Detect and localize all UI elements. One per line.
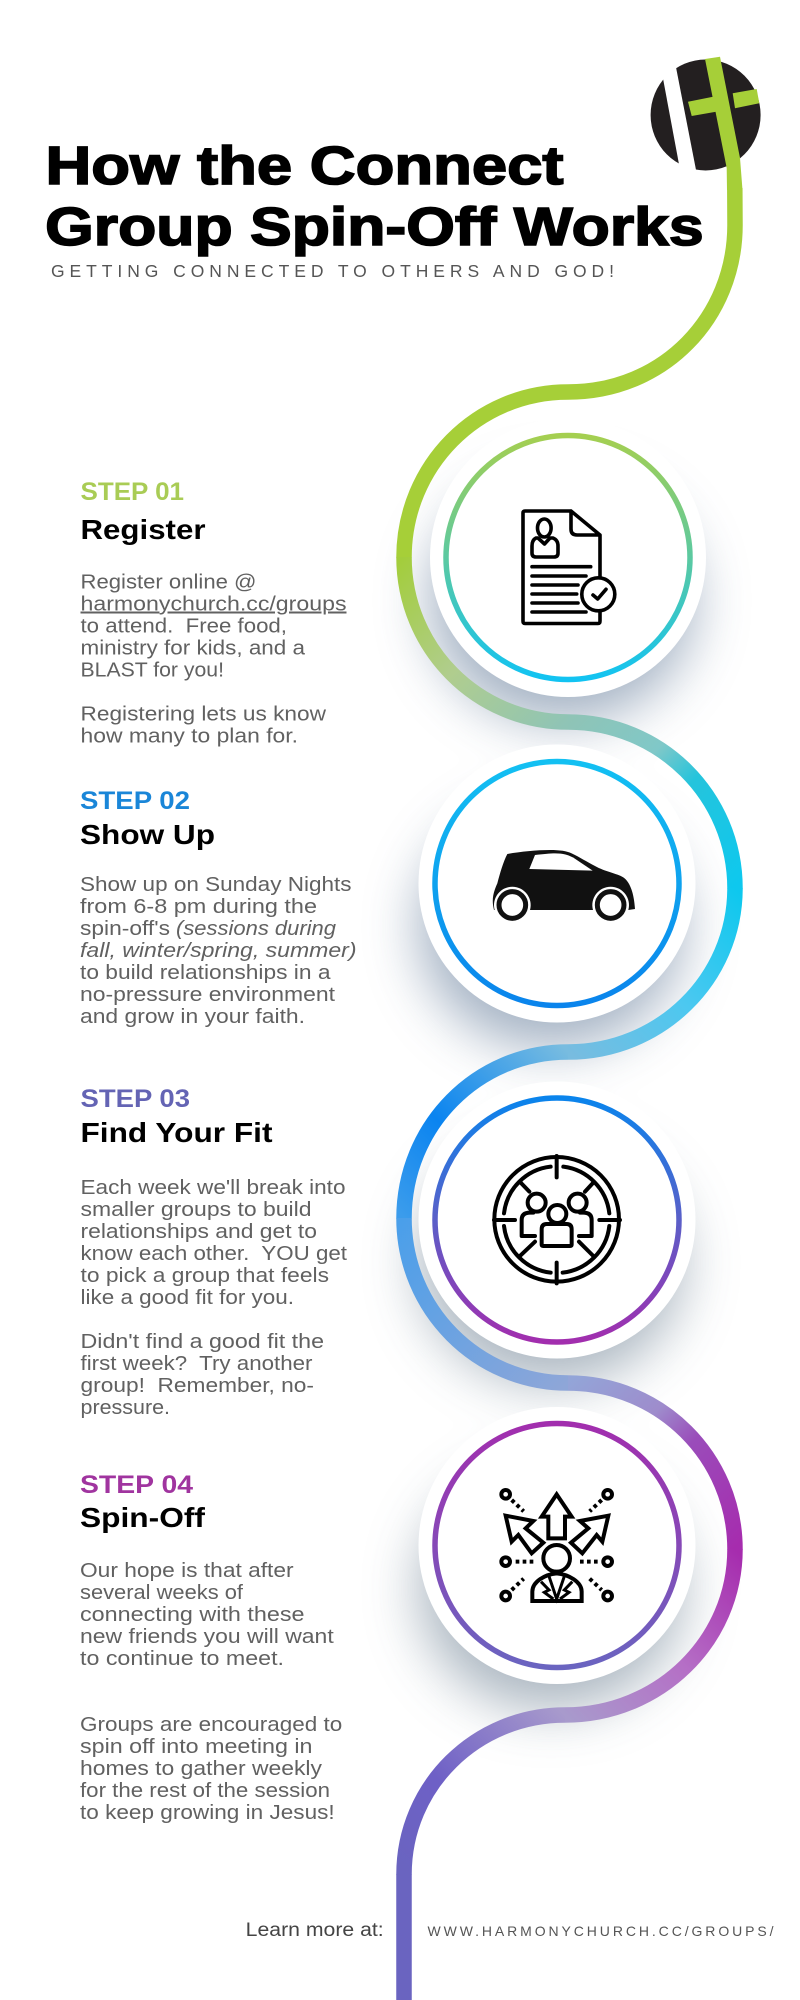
step 4 text: spin off into meeting in xyxy=(80,1736,312,1758)
icon: car xyxy=(493,850,635,918)
step 3 text: group! Remember, no- xyxy=(80,1375,314,1397)
step 4 text: to continue to meet. xyxy=(80,1648,284,1670)
card shadows xyxy=(419,478,694,1710)
step 2 text xyxy=(80,787,356,1028)
subtitle: GETTING CONNECTED TO OTHERS AND GOD! xyxy=(51,261,614,281)
step 4 text: to keep growing in Jesus! xyxy=(80,1802,335,1824)
step 2 text: from 6-8 pm during the xyxy=(80,896,317,918)
step 1 text: BLAST for you! xyxy=(80,660,224,682)
step 2 text: STEP 02 xyxy=(80,787,190,815)
step 4 text: for the rest of the session xyxy=(80,1780,330,1802)
step 1 text xyxy=(80,478,346,748)
step 1 text: how many to plan for. xyxy=(80,726,298,748)
title xyxy=(45,136,704,257)
title: Group Spin-Off Works xyxy=(45,197,704,257)
step 3 text: know each other. YOU get xyxy=(80,1243,347,1265)
step 4 circle xyxy=(418,1407,696,1684)
step 3 text: STEP 03 xyxy=(80,1085,190,1113)
logo xyxy=(651,57,761,190)
step 1 text: ministry for kids, and a xyxy=(80,638,306,660)
step 1 text: Registering lets us know xyxy=(80,704,327,726)
step 3 text xyxy=(80,1085,347,1419)
step 4 text: Groups are encouraged to xyxy=(80,1714,342,1736)
step 2 text: Show up on Sunday Nights xyxy=(80,874,352,896)
step 3 text: first week? Try another xyxy=(80,1353,313,1375)
footer: learn more: Learn more at: xyxy=(246,1920,384,1941)
step 2 circle xyxy=(418,744,696,1022)
step 4 text: homes to gather weekly xyxy=(80,1758,322,1780)
title: How the Connect xyxy=(46,136,564,196)
step 4 text: several weeks of xyxy=(80,1582,243,1604)
step 2 text: (sessions during xyxy=(176,918,336,940)
step 2 text: fall, winter/spring, summer) xyxy=(80,940,356,962)
step 2 text: and grow in your faith. xyxy=(80,1006,305,1028)
step 3 text: Each week we'll break into xyxy=(80,1177,346,1199)
step 2 text: no-pressure environment xyxy=(80,984,335,1006)
step 3 text: smaller groups to build xyxy=(80,1199,312,1221)
icon: document with check xyxy=(523,511,615,624)
icon: target with people xyxy=(494,1156,620,1283)
step 4 text: Spin-Off xyxy=(80,1502,206,1533)
step 1 text: Register online @ xyxy=(80,572,256,594)
icon: person with diverging arrows xyxy=(501,1490,612,1601)
step 1 text: to attend. Free food, xyxy=(80,616,287,638)
step 3 text: like a good fit for you. xyxy=(80,1287,294,1309)
step 4 text xyxy=(80,1471,342,1824)
step 4 text: STEP 04 xyxy=(80,1471,193,1499)
step 3 text: to pick a group that feels xyxy=(80,1265,329,1287)
winding gradient path xyxy=(404,188,735,2000)
step 3 text: Find Your Fit xyxy=(80,1117,272,1148)
footer: url: WWW.HARMONYCHURCH.CC/GROUPS/ xyxy=(428,1923,774,1939)
step 1 text: harmonychurch.cc/groups xyxy=(80,594,346,616)
step 1 text: STEP 01 xyxy=(80,478,184,506)
step 3 circle xyxy=(418,1082,696,1358)
step 4 text: connecting with these xyxy=(80,1604,304,1626)
step 2 text: spin-off's xyxy=(80,918,170,940)
step 2 text: Show Up xyxy=(80,819,215,850)
step 1 circle xyxy=(430,418,706,697)
step 3 text: relationships and get to xyxy=(80,1221,317,1243)
step 4 text: Our hope is that after xyxy=(80,1560,294,1582)
step 1 text: Register xyxy=(80,514,206,545)
step 4 text: new friends you will want xyxy=(80,1626,334,1648)
step 3 text: pressure. xyxy=(80,1397,170,1419)
step 3 text: Didn't find a good fit the xyxy=(80,1331,324,1353)
step 2 text: to build relationships in a xyxy=(80,962,331,984)
